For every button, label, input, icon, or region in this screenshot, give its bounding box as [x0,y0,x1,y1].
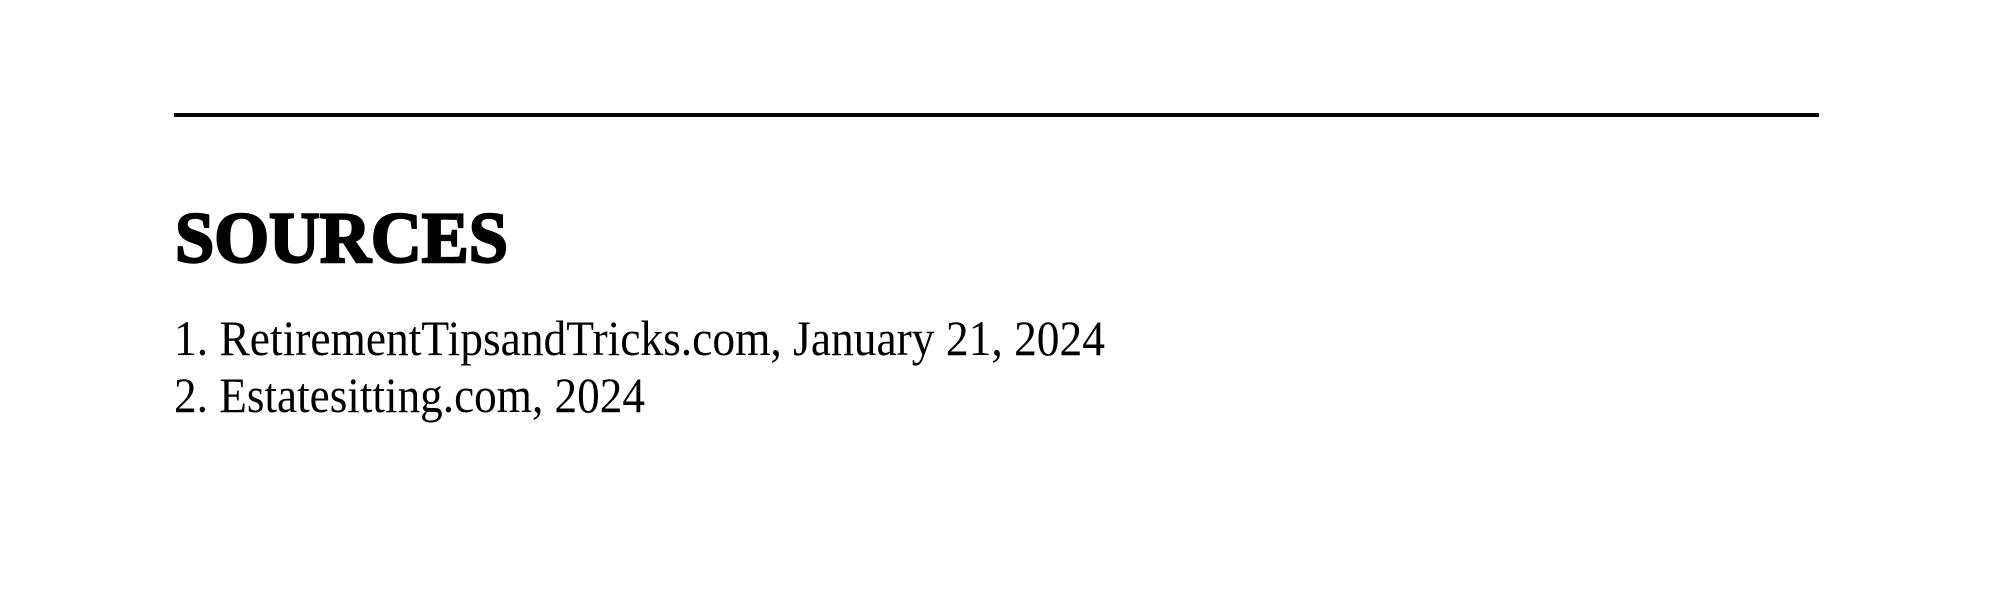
heading: sources: SOURCES [175,198,508,278]
source 1: 1. RetirementTipsandTricks.com, January 21, 2024 [174,310,1105,366]
text block: source list [174,310,1105,423]
source 2: 2. Estatesitting.com, 2024 [174,367,645,423]
